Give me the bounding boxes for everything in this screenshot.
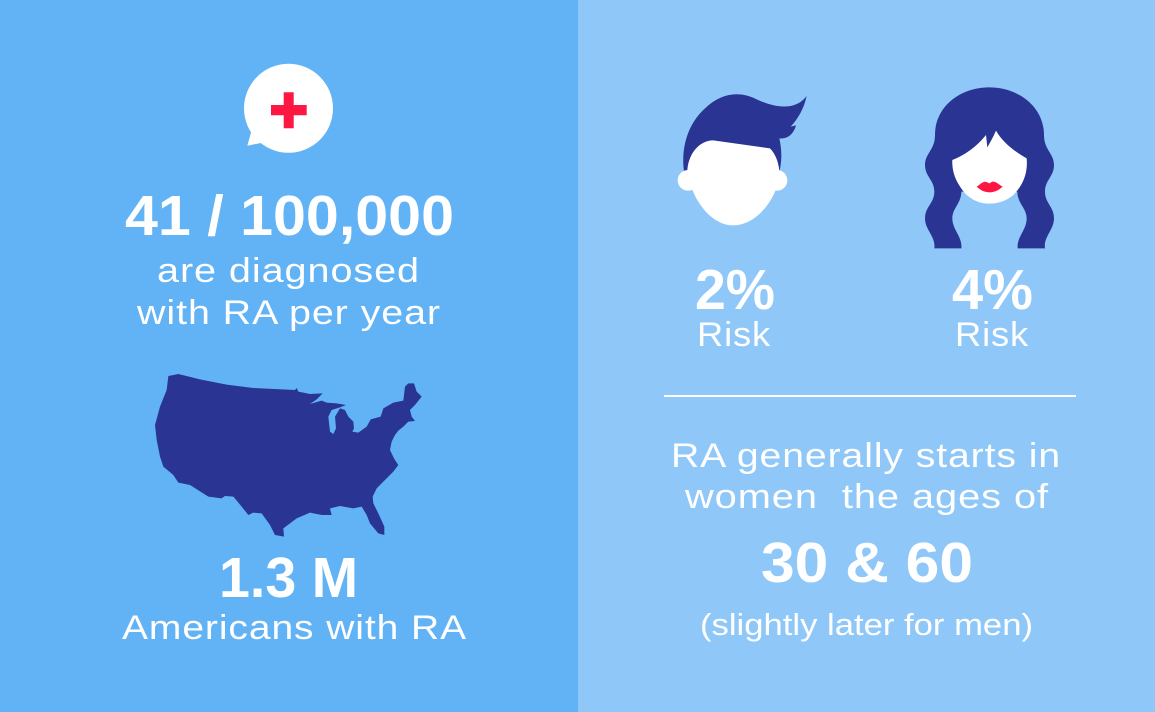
statistic: 4% risk — [952, 258, 1033, 354]
statistic: 30 & 60: 30 & 60 — [761, 531, 973, 595]
statistic: 1.3 M: 1.3 M — [219, 546, 358, 610]
text: RA generally starts in women the ages of: women the ages of — [684, 478, 1049, 516]
statistic: 2% risk: Risk — [697, 316, 771, 354]
text: are diagnosed with RA per year: are diagnosed — [157, 252, 420, 290]
statistic: 4% risk: 4% — [952, 258, 1033, 322]
statistic: 2% risk — [695, 258, 775, 354]
text: RA generally starts in women the ages of: RA generally starts in — [671, 437, 1061, 475]
icon: man head — [678, 94, 807, 225]
panel: right background — [578, 0, 1155, 712]
panel: left background — [0, 0, 578, 712]
icon: speech bubble with medical cross — [244, 64, 333, 153]
statistic: 41 / 100,000: 41 / 100,000 — [125, 184, 454, 248]
text: slightly later for men: (slightly later for men) — [700, 607, 1033, 642]
text: are diagnosed with RA per year — [136, 252, 441, 332]
statistic: 2% risk: 2% — [695, 258, 775, 322]
icon: woman head — [925, 87, 1054, 248]
text: Americans with RA: Americans with RA — [122, 609, 467, 647]
icon: map of the United States — [155, 374, 422, 537]
text: are diagnosed with RA per year: with RA per year — [136, 294, 441, 332]
text: RA generally starts in women the ages of — [671, 437, 1061, 516]
statistic: 4% risk: Risk — [955, 316, 1029, 354]
